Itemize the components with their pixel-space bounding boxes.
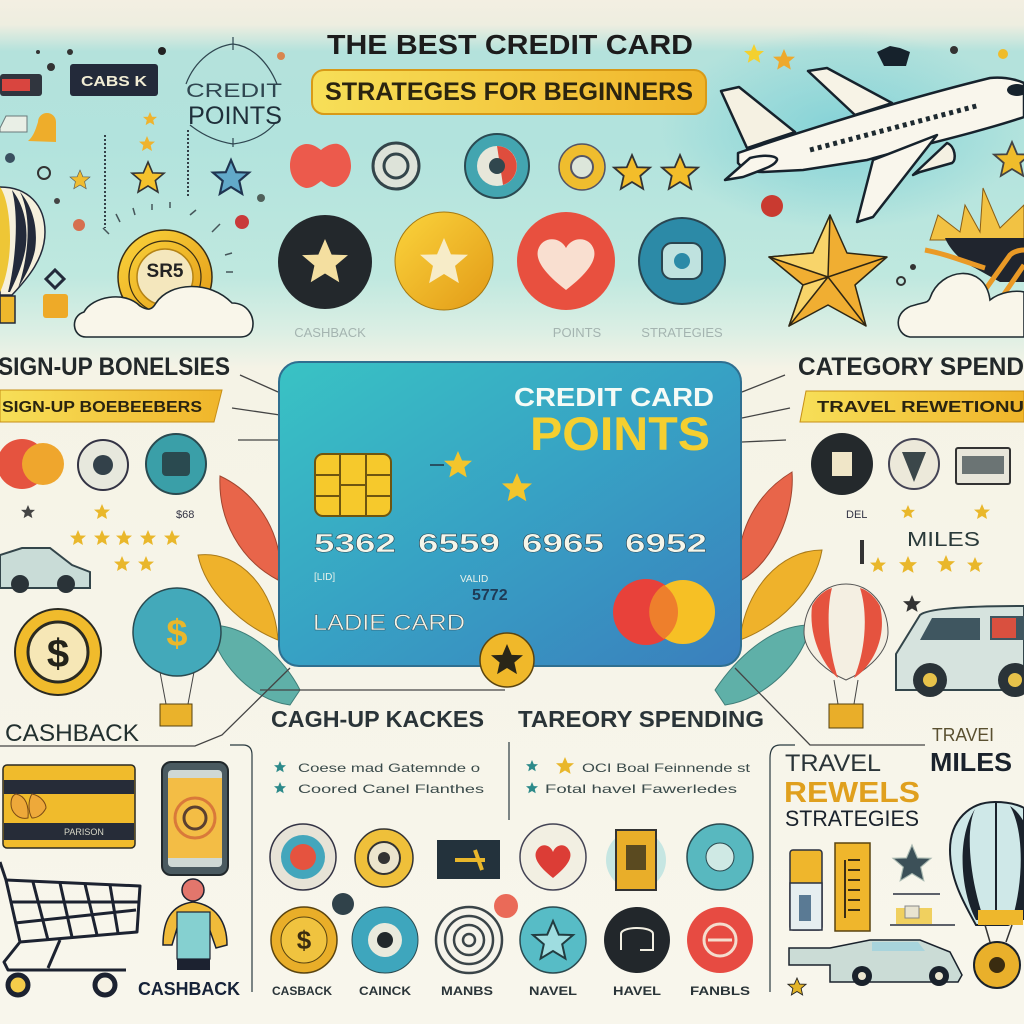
title xyxy=(312,29,706,114)
travel miles labels xyxy=(785,725,1012,777)
icon: silver car xyxy=(789,940,962,986)
lower row captions xyxy=(272,984,750,998)
icon: van xyxy=(896,606,1024,697)
lower row captions: CASBACK xyxy=(272,984,332,998)
icon: burst and dark bowl xyxy=(925,188,1024,300)
star rating strip: $68 xyxy=(176,509,194,521)
top row small icons xyxy=(290,134,698,198)
icon: cloud right xyxy=(898,273,1024,337)
title banner: STRATEGES FOR BEGINNERS xyxy=(325,78,693,106)
icon: large gold star xyxy=(769,215,887,326)
icon: gold dollar coin: SR5 xyxy=(147,261,184,282)
cashback label: CASHBACK xyxy=(5,720,139,747)
card title: CREDIT CARD xyxy=(514,382,714,412)
strategies subheading: STRATEGIES xyxy=(785,806,919,831)
icon: gold ring xyxy=(559,144,605,190)
card number xyxy=(314,528,707,558)
credit points label: POINTS xyxy=(188,102,282,130)
bottom center headings xyxy=(271,706,764,796)
central credit card xyxy=(279,362,741,687)
icon: two gold stars xyxy=(614,155,698,189)
icon: gold bottle and card xyxy=(790,843,870,931)
small stars and marks xyxy=(744,44,1024,285)
icon: cloud xyxy=(74,286,253,337)
lower row icons xyxy=(271,893,753,973)
icon: teal dollar balloon: $ xyxy=(166,613,188,655)
icon: teal emblem circle xyxy=(639,218,725,304)
icon row xyxy=(0,434,206,494)
right heading: category spending xyxy=(798,353,1024,422)
title line one: THE BEST CREDIT CARD xyxy=(327,29,693,60)
card small details: 5772 xyxy=(472,587,508,604)
yellow banner: TRAVEL REWETIONU xyxy=(817,399,1024,416)
top left balloon and coin cloud xyxy=(0,187,253,337)
card number: 5362 xyxy=(314,528,396,558)
icon: airplane xyxy=(721,68,1024,222)
right decorative leaves xyxy=(715,472,822,705)
icon: dollar coin: $ xyxy=(47,632,69,676)
icon: phone xyxy=(162,762,228,875)
travel miles labels: TRAVEL xyxy=(785,750,881,777)
card body xyxy=(279,362,741,666)
card title xyxy=(514,382,714,460)
lower row captions: NAVEL xyxy=(529,984,577,998)
lower row icons: $ xyxy=(297,925,312,955)
right column heading: TAREORY SPENDING xyxy=(518,706,764,732)
card stars xyxy=(430,451,532,501)
travel miles labels: MILES xyxy=(930,747,1012,777)
miles stars row xyxy=(846,504,990,573)
connector lines around card xyxy=(0,375,925,746)
bottom center icon grid xyxy=(270,824,753,998)
icon: large balloon xyxy=(950,802,1024,988)
divider lines lower panels xyxy=(230,742,795,992)
icon: dark star xyxy=(893,845,931,881)
icon: shopping cart xyxy=(0,862,140,995)
left decorative leaves xyxy=(198,476,300,705)
title banner xyxy=(312,70,706,114)
right column notes: Fotal havel Fawerledes xyxy=(545,782,737,796)
circle captions: CASHBACK xyxy=(294,325,366,340)
small icons and stars xyxy=(0,47,285,231)
credit points label: CREDIT xyxy=(186,81,283,102)
upper row icons xyxy=(270,824,753,890)
icon: teal dollar balloon xyxy=(133,588,221,726)
icon: car xyxy=(0,548,90,593)
icon: gold bank card: PARISON xyxy=(64,827,104,837)
cash tag xyxy=(0,64,158,96)
yellow banner xyxy=(0,390,222,422)
small dark star xyxy=(903,595,921,612)
cash tag: CABS K xyxy=(81,73,147,90)
icon: black star circle xyxy=(278,215,372,309)
small gold marks xyxy=(890,894,955,925)
card network logo xyxy=(613,579,715,645)
heading text: CATEGORY SPEND xyxy=(798,353,1024,381)
star rating strip xyxy=(21,504,194,571)
lower row captions: CAINCK xyxy=(359,984,411,998)
card chip xyxy=(315,454,391,516)
right panel icons xyxy=(804,433,1024,728)
travel miles labels: TRAVEI xyxy=(932,725,994,745)
top right: airplane and star xyxy=(721,44,1024,337)
large category circles xyxy=(278,212,725,340)
card small details: [LID] xyxy=(314,572,335,583)
heading text: SIGN-UP BONELSIES xyxy=(0,353,230,381)
gold star coin xyxy=(480,633,534,687)
left panel icons xyxy=(0,434,221,747)
icon row xyxy=(811,433,1010,495)
left heading: sign-up bonuses xyxy=(0,353,230,422)
right column notes xyxy=(526,757,751,796)
card number: 6952 xyxy=(625,528,707,558)
icon: gold bank card xyxy=(3,765,135,848)
circle captions: STRATEGIES xyxy=(641,325,723,340)
rewards heading: REWELS xyxy=(784,777,920,809)
small star xyxy=(788,978,806,995)
top left cluster: cash tag and credit points xyxy=(0,37,285,231)
yellow banner xyxy=(800,391,1024,422)
left column notes: Coored Canel Flanthes xyxy=(298,782,484,796)
card title: POINTS xyxy=(530,407,710,460)
left column heading: CAGH-UP KACKES xyxy=(271,706,484,732)
lower row captions: MANBS xyxy=(441,984,493,998)
icon: gold star circle xyxy=(395,212,493,310)
lower row captions: FANBLS xyxy=(690,984,750,998)
icon: red heart blob xyxy=(290,144,351,188)
credit points label xyxy=(186,37,283,147)
bottom left illustrations xyxy=(0,762,240,999)
icon: gold dollar coin xyxy=(103,202,233,324)
yellow banner: SIGN-UP BOEBEEBERS xyxy=(2,399,202,416)
icon: hot air balloon xyxy=(0,187,68,323)
left column notes: Coese mad Gatemnde o xyxy=(298,761,480,775)
cashback label: CASHBACK xyxy=(138,979,240,999)
circle captions xyxy=(294,325,723,340)
card small details: VALID xyxy=(460,574,488,585)
card number: 6559 xyxy=(418,528,500,558)
icon: red heart circle xyxy=(517,212,615,310)
icon: dark ring glyph xyxy=(373,143,419,189)
right column notes: OCI Boal Feinnende st xyxy=(582,761,751,775)
icon: dollar coin xyxy=(15,609,101,695)
bottom right panel xyxy=(784,725,1024,995)
icon: striped balloon xyxy=(804,584,888,728)
cardholder name: LADIE CARD xyxy=(313,610,465,635)
circle captions: POINTS xyxy=(553,325,602,340)
icon: target ring xyxy=(465,134,529,198)
lower row captions: HAVEL xyxy=(613,984,661,998)
miles stars row: MILES xyxy=(907,529,980,551)
miles stars row: DEL xyxy=(846,509,867,521)
left column notes xyxy=(274,761,484,796)
card small details xyxy=(314,572,508,604)
card number: 6965 xyxy=(522,528,604,558)
icon: person xyxy=(163,879,227,970)
